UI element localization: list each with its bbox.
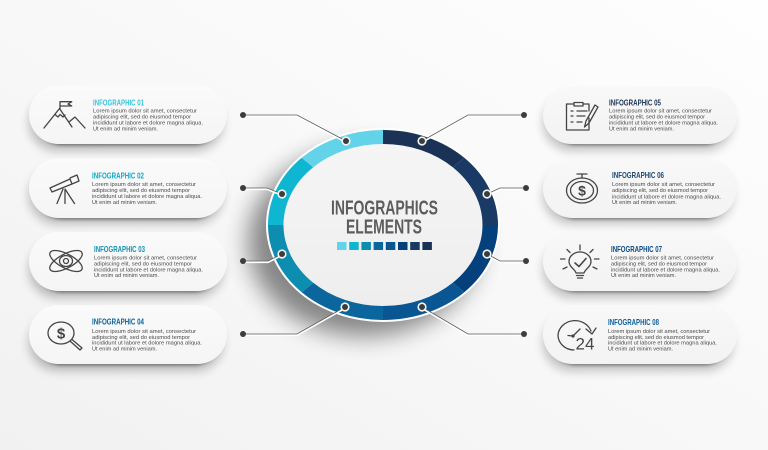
text block: infographic 08 <box>608 317 717 352</box>
text block: infographic 07 <box>611 244 720 279</box>
text block: infographic 01: adipiscing elit, sed do eiusmod tempor <box>93 115 191 121</box>
panel: infographic 01 card <box>29 85 227 151</box>
text block: infographic 05 <box>609 98 718 132</box>
connectors <box>240 112 529 337</box>
text block: infographic 02: Lorem ipsum dolor sit amet, consectetur <box>92 182 196 188</box>
text block: infographic 07: INFOGRAPHIC 07 <box>611 244 662 254</box>
icon: stopwatch with dollar <box>566 174 598 203</box>
text block: infographic 08: INFOGRAPHIC 08 <box>608 317 659 327</box>
text block: infographic 02: INFOGRAPHIC 02 <box>92 171 144 181</box>
panel: infographic 06 card <box>543 159 737 224</box>
panel: right cards <box>543 87 737 371</box>
title: infographics elements: INFOGRAPHICS <box>331 196 438 220</box>
text block: infographic 02: incididunt ut labore et dolore magna aliqua. <box>92 194 202 200</box>
text block: infographic 08: Ut enim ad minim veniam. <box>608 346 673 352</box>
text block: infographic 06: adipiscing elit, sed do eiusmod tempor <box>612 188 708 194</box>
text block: infographic 07: Lorem ipsum dolor sit amet, consectetur <box>611 256 714 262</box>
text block: infographic 05: adipiscing elit, sed do eiusmod tempor <box>609 115 705 121</box>
icon: stopwatch with dollar: $ <box>578 182 586 198</box>
text block: infographic 04: INFOGRAPHIC 04 <box>92 317 144 327</box>
text block: infographic 02: adipiscing elit, sed do eiusmod tempor <box>92 188 190 194</box>
panel: infographic 02 card <box>29 158 227 224</box>
text block: infographic 06: Ut enim ad minim veniam. <box>612 200 677 206</box>
text block: infographic 02 <box>92 171 202 206</box>
text block: infographic 05: incididunt ut labore et dolore magna aliqua. <box>609 121 718 127</box>
panel: infographic 03 card <box>29 232 227 298</box>
text block: infographic 04 <box>92 317 202 352</box>
text block: infographic 04: Ut enim ad minim veniam. <box>92 346 157 352</box>
panel: infographic 04 card <box>29 305 227 371</box>
icon: light bulb with check <box>560 245 599 278</box>
text block: infographic 03: incididunt ut labore et dolore magna aliqua. <box>94 267 203 273</box>
text block: infographic 03: Lorem ipsum dolor sit amet, consectetur <box>94 256 197 262</box>
legend: color squares <box>337 242 432 250</box>
icon: 24 hour clock: 24 <box>576 334 594 354</box>
text block: infographic 07: adipiscing elit, sed do eiusmod tempor <box>611 261 707 267</box>
icon: magnifier with dollar: $ <box>57 326 66 342</box>
icon: telescope <box>50 175 79 204</box>
icon: atom <box>47 246 85 276</box>
icon: magnifier with dollar <box>48 322 82 350</box>
panel: infographic 07 card <box>543 232 737 298</box>
text block: infographic 06: Lorem ipsum dolor sit amet, consectetur <box>612 182 715 188</box>
text block: infographic 06: INFOGRAPHIC 06 <box>612 170 664 180</box>
text block: infographic 01: Lorem ipsum dolor sit amet, consectetur <box>93 109 197 115</box>
inner disc <box>284 144 482 306</box>
text block: infographic 05: INFOGRAPHIC 05 <box>609 98 661 108</box>
panel: left cards <box>29 85 227 371</box>
text block: infographic 06 <box>612 170 721 206</box>
title: infographics elements: ELEMENTS <box>346 216 422 238</box>
text block: infographic 04: adipiscing elit, sed do eiusmod tempor <box>92 335 190 341</box>
text block: infographic 03: INFOGRAPHIC 03 <box>94 244 145 254</box>
text block: infographic 04: Lorem ipsum dolor sit amet, consectetur <box>92 329 196 335</box>
text block: infographic 01: INFOGRAPHIC 01 <box>93 98 144 108</box>
icon: 24 hour clock <box>558 321 596 354</box>
icon: mountain with flag <box>44 102 85 128</box>
text block: infographic 03: Ut enim ad minim veniam. <box>94 273 159 279</box>
shadow: central circle <box>248 148 480 336</box>
text block: infographic 07: Ut enim ad minim veniam. <box>611 273 676 279</box>
text block: infographic 02: Ut enim ad minim veniam. <box>92 200 157 206</box>
text block: infographic 03: adipiscing elit, sed do eiusmod tempor <box>94 261 192 267</box>
icon: clipboard with pen <box>566 102 598 130</box>
text block: infographic 01: incididunt ut labore et dolore magna aliqua. <box>93 121 203 127</box>
chart: segmented ring <box>266 128 500 322</box>
text block: infographic 07: incididunt ut labore et dolore magna aliqua. <box>611 267 720 273</box>
text block: infographic 08: incididunt ut labore et dolore magna aliqua. <box>608 341 717 347</box>
text block: infographic 05: Lorem ipsum dolor sit amet, consectetur <box>609 109 712 115</box>
text block: infographic 05: Ut enim ad minim veniam. <box>609 126 674 132</box>
text block: infographic 01 <box>93 98 203 132</box>
text block: infographic 01: Ut enim ad minim veniam. <box>93 126 158 132</box>
text block: infographic 08: Lorem ipsum dolor sit amet, consectetur <box>608 329 710 335</box>
panel: infographic 08 card <box>543 305 737 371</box>
panel: infographic 05 card <box>543 87 737 151</box>
text block: infographic 08: adipiscing elit, sed do eiusmod tempor <box>608 335 704 341</box>
text block: infographic 04: incididunt ut labore et dolore magna aliqua. <box>92 341 202 347</box>
text block: infographic 06: incididunt ut labore et dolore magna aliqua. <box>612 195 721 201</box>
title: infographics elements <box>331 196 438 238</box>
text block: infographic 03 <box>94 244 203 279</box>
